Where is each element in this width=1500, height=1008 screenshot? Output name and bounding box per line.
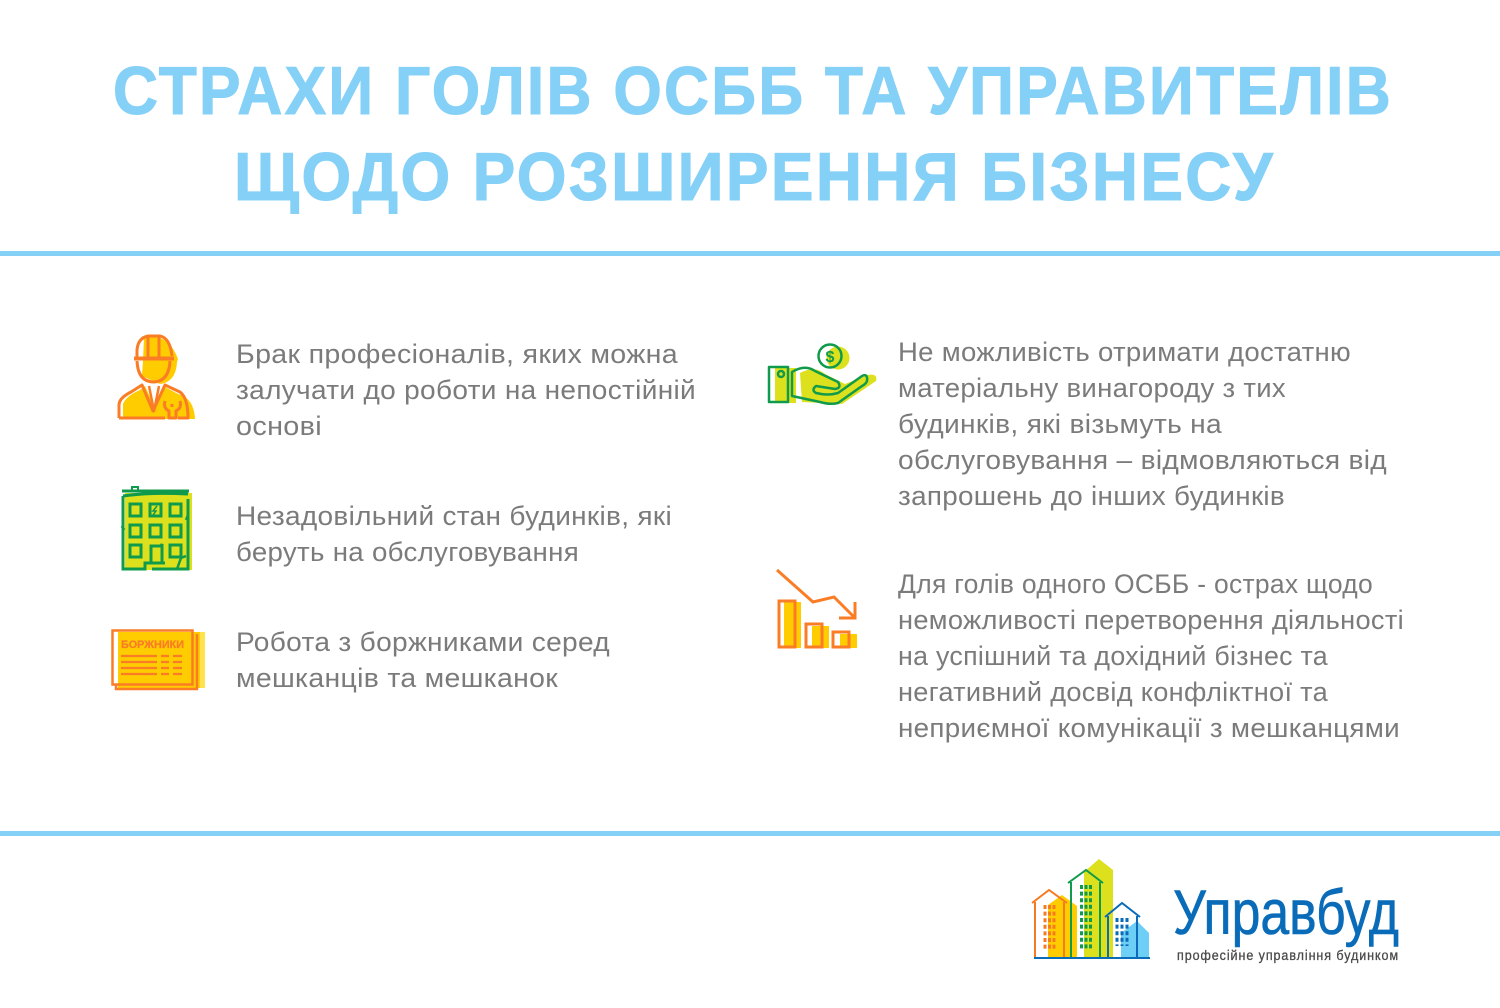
title: ЩОДО РОЗШИРЕННЯ БІЗНЕСУ [234,139,1275,215]
icon: worker [119,336,195,419]
text: building condition: беруть на обслуговування [236,537,579,567]
text: one OSBB fear: неможливості перетворення діяльності [898,605,1404,635]
text: reward: обслуговування – відмовляються від [898,445,1387,475]
text: building condition [236,501,672,567]
text: debtors: Робота з боржниками серед [236,627,610,657]
text: one OSBB fear: неприємної комунікації з мешканцями [898,713,1400,743]
logo: buildings [1032,859,1150,958]
logo: wordmark: професійне управління будинком [1177,948,1399,963]
text: building condition: Незадовільний стан будинків, які [236,501,672,531]
text: professionals: Брак професіоналів, яких можна [236,339,679,369]
text: one OSBB fear: негативний досвід конфліктної та [898,677,1329,707]
text: one OSBB fear: Для голів одного ОСББ - острах щодо [898,569,1373,599]
text: debtors [236,627,610,693]
icon: hand with coin: $ [826,349,835,366]
text: reward: Не можливість отримати достатню [898,337,1351,367]
text: one OSBB fear [898,569,1404,743]
text: professionals [236,339,696,441]
icon: hand with coin [769,344,876,404]
logo: wordmark: Управбуд [1173,878,1399,948]
icon: falling chart [777,570,857,648]
text: reward: запрошень до інших будинків [898,481,1285,511]
text: reward [898,337,1387,511]
text: reward: будинків, які візьмуть на [898,409,1223,439]
icon: damaged building [122,487,192,570]
text: debtors: мешканців та мешканок [236,663,558,693]
title: СТРАХИ ГОЛІВ ОСББ ТА УПРАВИТЕЛІВ [113,53,1393,129]
text: professionals: основі [236,411,322,441]
text: reward: матеріальну винагороду з тих [898,373,1286,403]
text: professionals: залучати до роботи на непостійній [236,375,696,405]
text: one OSBB fear: на успішний та дохідний бізнес та [898,641,1329,671]
icon: debtors document [112,630,205,689]
icon: debtors document: БОРЖНИКИ [121,639,184,651]
logo: wordmark [1173,878,1399,963]
title [113,53,1393,215]
